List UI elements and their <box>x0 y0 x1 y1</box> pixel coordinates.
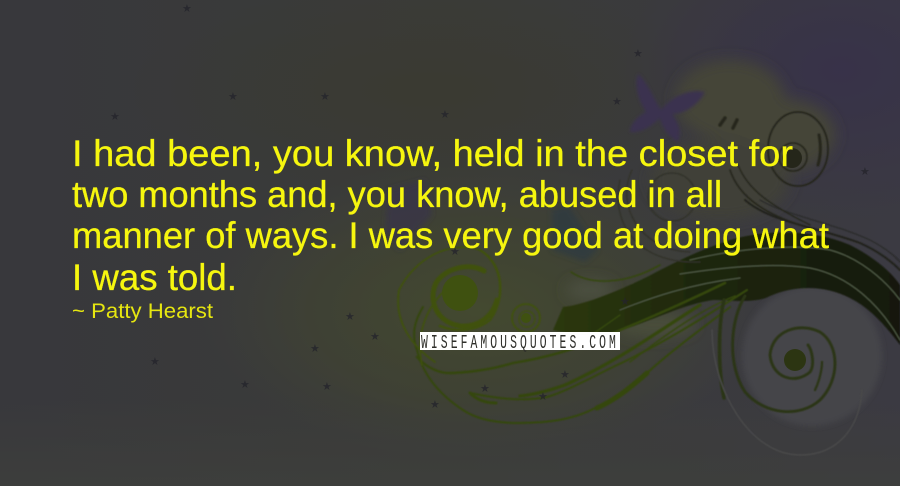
stars: ★ <box>480 382 490 395</box>
stars: ★ <box>370 330 380 343</box>
icon: purple butterfly <box>630 74 705 142</box>
middle rings <box>618 170 700 262</box>
stars: ★ <box>450 245 460 258</box>
quote text: I was told. <box>72 257 237 298</box>
attribution: ~ Patty Hearst <box>72 300 213 323</box>
lower right spiral <box>720 296 835 412</box>
faint butterflies behind text <box>385 180 598 262</box>
stars: ★ <box>430 398 440 411</box>
main green sweep <box>553 232 900 345</box>
quote text: I had been, you know, held in the closet for <box>72 133 793 174</box>
stars: ★ <box>633 47 643 60</box>
watermark badge: WISEFAMOUSQUOTES.COM <box>421 332 619 354</box>
spiral dots <box>442 148 806 371</box>
quote text: two months and, you know, abused in all <box>72 174 722 215</box>
quote text: manner of ways. I was very good at doing what <box>72 215 830 256</box>
stars: ★ <box>620 295 630 308</box>
faint rings <box>712 330 862 455</box>
stars <box>110 2 870 411</box>
stars: ★ <box>110 110 120 123</box>
left spiral <box>398 247 500 365</box>
stars: ★ <box>440 108 450 121</box>
stars: ★ <box>310 342 320 355</box>
stars: ★ <box>860 165 870 178</box>
clouds <box>566 60 835 337</box>
stars: ★ <box>150 355 160 368</box>
stars: ★ <box>228 90 238 103</box>
stars: ★ <box>612 95 622 108</box>
light strands in band <box>620 200 900 340</box>
swirl artwork <box>398 112 900 455</box>
stars: ★ <box>538 390 548 403</box>
stars: ★ <box>345 310 355 323</box>
stars: ★ <box>182 2 192 15</box>
stars: ★ <box>240 378 250 391</box>
stars: ★ <box>560 368 570 381</box>
stars: ★ <box>320 90 330 103</box>
stars: ★ <box>322 380 332 393</box>
stars: ★ <box>600 190 610 203</box>
small spiral <box>512 304 540 332</box>
lower right disc <box>742 286 882 426</box>
quote text <box>72 133 830 298</box>
top right spiral <box>720 112 828 225</box>
